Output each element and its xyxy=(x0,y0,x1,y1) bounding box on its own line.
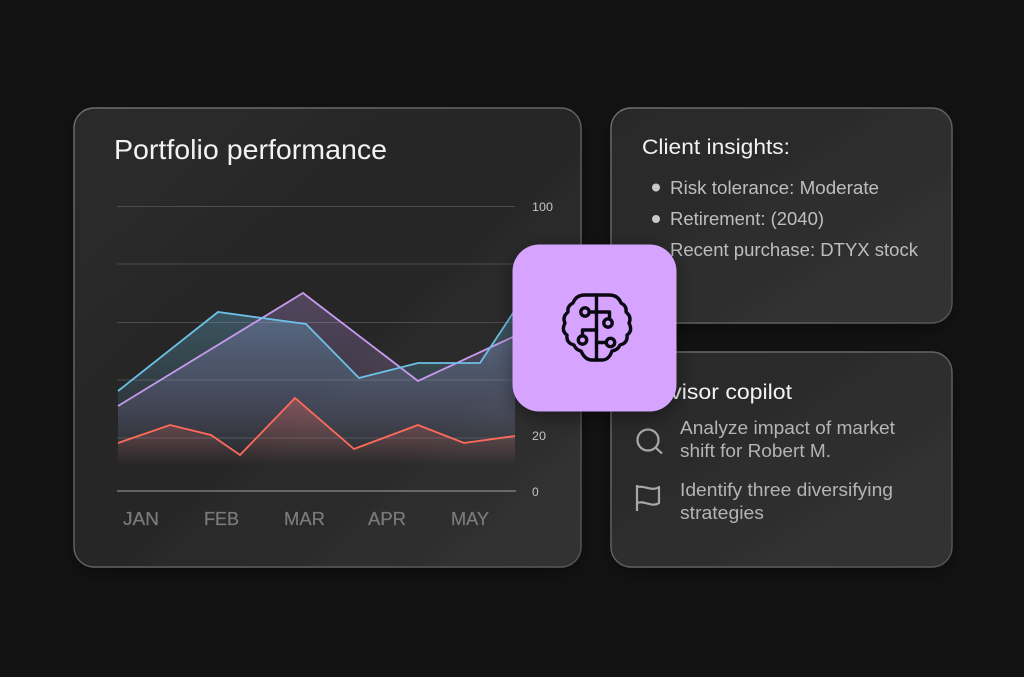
area: blue series xyxy=(118,310,515,465)
text: analyze impact: Analyze impact of market xyxy=(680,418,895,438)
icon: flag xyxy=(637,485,659,511)
bullet list: Retirement: (2040) xyxy=(670,209,824,229)
text: analyze impact: shift for Robert M. xyxy=(680,441,831,461)
area chart xyxy=(117,200,553,529)
panel: client insights xyxy=(611,108,952,323)
icon tile: AI brain xyxy=(512,244,676,412)
y axis labels: 100 xyxy=(532,200,553,214)
bullet list: Risk tolerance: Moderate xyxy=(670,178,879,198)
panel: advisor copilot xyxy=(611,352,952,567)
bullet list: Recent purchase: DTYX stock xyxy=(670,240,919,260)
x axis labels: FEB xyxy=(204,509,239,529)
text: identify strategies: Identify three diversifying xyxy=(680,480,893,500)
panel: portfolio performance xyxy=(74,108,581,567)
x axis labels: MAR xyxy=(284,509,325,529)
line: purple series xyxy=(118,293,515,406)
y axis labels xyxy=(532,200,553,499)
y axis labels: 20 xyxy=(532,429,546,443)
x axis labels: JAN xyxy=(123,509,159,529)
x axis labels: APR xyxy=(368,509,406,529)
x axis labels: MAY xyxy=(451,509,489,529)
heading: client insights: Client insights: xyxy=(642,136,790,159)
text: identify strategies xyxy=(680,480,893,523)
icon: circuit brain xyxy=(563,295,631,360)
line: red series xyxy=(118,398,515,455)
area: red series xyxy=(118,398,515,465)
heading: portfolio performance: Portfolio performance xyxy=(114,134,387,165)
bullet list xyxy=(652,178,919,260)
x axis labels xyxy=(123,509,489,529)
heading: advisor copilot: Advisor copilot xyxy=(642,381,792,404)
y axis labels: 0 xyxy=(532,485,539,499)
line: blue series xyxy=(118,310,515,391)
icon: search xyxy=(638,430,662,454)
area: purple series xyxy=(118,293,515,465)
text: analyze impact xyxy=(680,418,895,461)
text: identify strategies: strategies xyxy=(680,503,764,523)
